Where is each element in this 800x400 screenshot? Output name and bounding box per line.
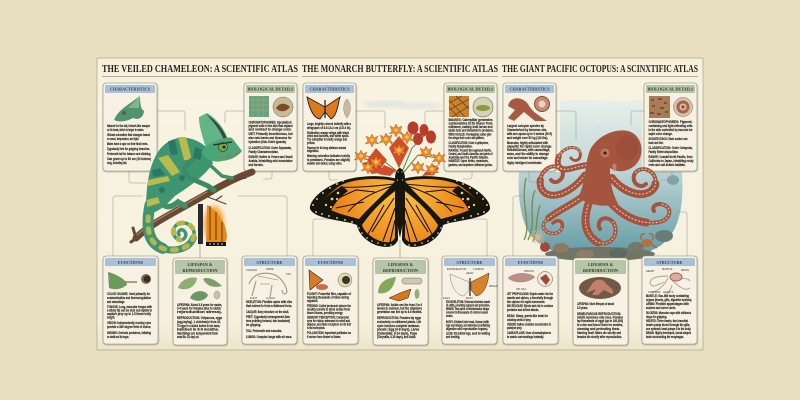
card: chameleon characteristics: Zygodactyl feet for gripping branches. bbox=[107, 147, 150, 151]
card: butterfly functions: FUNCTIONS bbox=[318, 260, 343, 265]
icon: butterfly life cycle bbox=[378, 277, 422, 301]
card: octopus lifespan and reproduction: Starving itself. Males die shortly and bbox=[577, 331, 621, 335]
card: octopus lifespan and reproduction: lay thousands of eggs (up to 100,000) bbox=[577, 319, 623, 323]
card: octopus lifespan and reproduction: LIFESPAN & bbox=[588, 262, 613, 267]
card: octopus biological details: taste and feel. bbox=[648, 141, 664, 145]
card: chameleon structure: TAIL: Prehensile and muscular. bbox=[246, 329, 282, 333]
card: butterfly biological details: cardenolides in its tissue from bbox=[448, 122, 492, 126]
card: octopus characteristics: capacity for rapid color change. bbox=[507, 144, 552, 148]
card: butterfly functions: mouth) unrolls to drink nectar from bbox=[307, 308, 350, 312]
card: chameleon lifespan and reproduction: sexual life, 4-14 days) out. bbox=[177, 335, 199, 339]
card: butterfly characteristics: The caterpillar is boldly orange and bbox=[307, 138, 347, 142]
card: octopus structure: rings for gripping. bbox=[646, 315, 667, 319]
card: octopus biological details: SUCKER DISCS: Each sucker can bbox=[648, 137, 688, 141]
icon: wing scales bbox=[449, 96, 469, 117]
card: octopus functions: cracking shells of prey. bbox=[507, 318, 531, 322]
card: octopus characteristics: with arm spans up to 9 meters (30 ft) bbox=[506, 132, 552, 136]
card: octopus lifespan and reproduction: REPRODUCTION bbox=[583, 268, 619, 273]
card: butterfly structure: STRUCTURE bbox=[456, 260, 482, 265]
card: butterfly structure: and feeding. bbox=[446, 335, 460, 339]
card: chameleon structure bbox=[242, 256, 297, 344]
mantle shading bbox=[616, 135, 638, 161]
diagram: octopus anatomy: SUCKERS bbox=[648, 290, 661, 294]
card: octopus biological details: containing and light-reflecting cells bbox=[648, 124, 693, 128]
card: chameleon functions: length. bbox=[107, 316, 115, 320]
icon: skin scales bbox=[249, 96, 269, 117]
card: octopus functions: JET PROPULSION: Expels water via the bbox=[507, 292, 553, 296]
card: butterfly lifespan and reproduction: weeks in summer, but the migratory bbox=[376, 306, 422, 310]
card: octopus characteristics: Highly intelligent invertebrate. bbox=[507, 161, 542, 165]
card: octopus structure: one systemic heart pumps it to the body. bbox=[646, 327, 691, 331]
card: butterfly characteristics bbox=[303, 83, 356, 171]
diagram: chameleon skeleton: FOOT bbox=[250, 296, 258, 300]
icon: siphon and beak bbox=[508, 269, 552, 291]
icon: octopus and sucker bbox=[508, 96, 550, 121]
card: octopus biological details: CLASSIFICATION: Order Octopoda, bbox=[648, 146, 693, 150]
card: chameleon lifespan and reproduction: Hatchlings are independent from bbox=[177, 332, 218, 336]
card: butterfly functions: flower blooms, providing energy. bbox=[307, 311, 343, 315]
card: octopus structure: MANTLE: Sac-like body containing bbox=[646, 294, 689, 298]
diagram: chameleon skeleton: SPINE bbox=[266, 267, 274, 271]
card: butterfly functions: traveling thousands of miles during bbox=[307, 296, 349, 300]
card: butterfly characteristics: wingspan of 8.9-10.2 cm (3.5-4 in). bbox=[306, 126, 351, 130]
diagram: butterfly anatomy: THORAX bbox=[473, 267, 484, 271]
icon: monarch and chrysalis bbox=[307, 97, 350, 119]
watercolor sky behind butterfly bbox=[363, 101, 442, 109]
card: butterfly functions: to find nectar plants. bbox=[307, 326, 325, 330]
yellow bands bbox=[147, 137, 192, 207]
card: butterfly functions: FEEDING: Coiled proboscis (above the bbox=[307, 304, 351, 308]
title: monarch butterfly: THE MONARCH BUTTERFLY: A SCIENTIFIC ATLAS bbox=[302, 64, 498, 75]
hind leg bbox=[160, 200, 185, 207]
card: octopus structure bbox=[642, 256, 697, 344]
card: octopus functions: mantle and siphon, a forcefully through bbox=[507, 296, 553, 300]
card: butterfly characteristics: veins and borders, and white spots. bbox=[307, 134, 349, 138]
title: giant pacific octopus: THE GIANT PACIFIC OCTOPUS: A SCINXTIFIC ATLAS bbox=[502, 64, 698, 75]
diagram: octopus anatomy: HEARTS bbox=[663, 290, 674, 294]
card: chameleon biological details: and contract to change color. bbox=[248, 128, 292, 132]
siphon bbox=[612, 164, 616, 171]
card: butterfly structure: LEGS: Six jointed legs, used for walking bbox=[446, 332, 490, 336]
card: chameleon lifespan and reproduction: LIFESPAN: About 6-8 years for males, bbox=[177, 303, 222, 307]
card: octopus lifespan and reproduction: 3-5 years. bbox=[577, 306, 588, 310]
card: butterfly functions: it moves from flower to flower. bbox=[307, 335, 341, 339]
card: chameleon biological details: CHROMATOPHORES: Specialized bbox=[248, 120, 292, 124]
card: butterfly structure: BODY: Divided into head, thorax (with bbox=[446, 320, 489, 324]
card: butterfly functions: balance, and taste receptors on its feet bbox=[307, 322, 352, 326]
card: octopus biological details: California to Japan, inhabiting rocky bbox=[648, 159, 694, 163]
card: octopus lifespan and reproduction bbox=[573, 258, 628, 345]
icon: skin cell circle bbox=[273, 97, 293, 117]
card: octopus characteristics: color and texture for camouflage. bbox=[507, 156, 548, 160]
diagram: chameleon skeleton: TAIL bbox=[286, 272, 292, 276]
card: butterfly structure bbox=[442, 256, 498, 344]
card: chameleon lifespan and reproduction: reproduction stress). bbox=[177, 310, 222, 314]
diagram: chameleon skeleton bbox=[246, 267, 292, 300]
card: butterfly functions: FLIGHT: Powerful flier, capable of bbox=[307, 292, 352, 296]
diagram: butterfly anatomy: LEGS bbox=[443, 296, 450, 300]
card: octopus biological details: rapid color change. bbox=[648, 132, 673, 136]
card: octopus lifespan and reproduction: SEMELPAROUS REPRODUCTION: bbox=[577, 312, 621, 316]
illustration: veiled chameleon bbox=[131, 113, 252, 250]
card: butterfly lifespan and reproduction: (Caterpillar, 9-14 days), Pupa bbox=[377, 332, 417, 336]
card: octopus functions: paralyze prey. bbox=[507, 326, 522, 330]
illustration: giant pacific octopus bbox=[540, 130, 669, 243]
icon: chameleon and eye bbox=[108, 272, 151, 289]
card: chameleon functions: COLOR CHANGE: Used primarily for bbox=[107, 292, 150, 296]
branch bbox=[131, 172, 252, 242]
connector lines bbox=[113, 111, 687, 258]
card: butterfly functions bbox=[303, 256, 358, 344]
card: chameleon characteristics: long, including tail. bbox=[107, 161, 127, 165]
icon: siphon and beak: INK SAC bbox=[516, 287, 527, 291]
diagram: butterfly anatomy: BODY bbox=[466, 296, 474, 300]
diagram: butterfly anatomy: WINGS bbox=[489, 284, 498, 288]
icon: chameleon head bbox=[114, 96, 144, 121]
icon: octopus in den bbox=[579, 277, 621, 299]
card: octopus structure: STRUCTURE bbox=[656, 260, 682, 265]
card: chameleon characteristics: Males have a spur on their hind heels. bbox=[107, 142, 148, 146]
card: octopus characteristics: and weight over 50 kg (110 lbs). bbox=[507, 136, 548, 140]
card: chameleon functions: TONGUE: Long, muscular tongue with bbox=[107, 305, 152, 309]
tail bbox=[148, 205, 194, 250]
suckers bbox=[540, 148, 669, 243]
card: chameleon structure: toes pointing forward, two backward) bbox=[246, 319, 290, 323]
card: chameleon lifespan and reproduction: 70 eggs in a clutch buried in hot sand, bbox=[177, 324, 220, 328]
card: butterfly lifespan and reproduction: generation can live up to 8-9 months. bbox=[377, 310, 422, 314]
card: butterfly structure: scales. bbox=[446, 314, 453, 318]
card: octopus characteristics: Muscular, highly articulated with bbox=[507, 141, 548, 145]
icon: siphon and beak: SIPHON bbox=[524, 269, 534, 273]
diagram: octopus anatomy bbox=[646, 267, 690, 296]
title: veiled chameleon: THE VEILED CHAMELEON: A SCIENTIFIC ATLAS bbox=[102, 64, 298, 75]
head bbox=[201, 137, 242, 162]
card: octopus structure: SUCKERS: Muscular cups with chitinous bbox=[646, 311, 691, 315]
icon: caterpillar circle bbox=[473, 97, 493, 117]
icon: nautilus spiral bbox=[674, 98, 692, 116]
card: chameleon functions: provide a 360 degree field of vision. bbox=[107, 325, 151, 329]
card: chameleon characteristics bbox=[103, 83, 157, 171]
card: octopus biological details: in the skin controlled by muscles for bbox=[648, 128, 693, 132]
illustration: monarch butterfly bbox=[310, 168, 490, 247]
card: chameleon biological details: hydration (Sub-Order Iguania). bbox=[248, 140, 287, 144]
sea urchin bbox=[530, 229, 546, 245]
card: chameleon biological details: DIET: Primarily insectivorous, but bbox=[248, 132, 293, 136]
card: butterfly biological details: Australia and the Pacific Islands. bbox=[448, 156, 489, 160]
card: chameleon functions: on stealth and its tongue. bbox=[107, 335, 129, 339]
atlas sheet panel bbox=[97, 58, 703, 350]
card: octopus characteristics: Reddish-brown, with camouflage, bbox=[507, 148, 550, 152]
card: octopus functions: predators and deflect attacks. bbox=[507, 308, 539, 312]
card: butterfly functions: SENSORY PERCEPTION: Compound bbox=[307, 316, 349, 320]
card: butterfly biological details: RANGE: Found throughout North, bbox=[448, 148, 492, 152]
arms bbox=[540, 148, 669, 243]
underwater scene behind octopus bbox=[519, 100, 682, 261]
dark mottling bbox=[152, 140, 203, 193]
card: octopus functions: the siphon for rapid movement. bbox=[507, 300, 545, 304]
card: chameleon functions: VISION: Independently moving eyes bbox=[107, 321, 151, 325]
card: butterfly functions: POLLINATION: Important pollinator as bbox=[307, 331, 351, 335]
card: chameleon biological details: and forests. bbox=[248, 163, 264, 167]
card: chameleon structure: that extend to form a flattened form. bbox=[246, 304, 292, 308]
card: octopus lifespan and reproduction: Adults reproduce only once. Females bbox=[577, 316, 623, 320]
card: butterfly lifespan and reproduction: REPRODUCTION: Females lay eggs bbox=[377, 316, 421, 320]
illustration: milkweed flowers bbox=[354, 122, 446, 176]
card: chameleon structure: for gripping. bbox=[246, 323, 261, 327]
diagram: octopus anatomy: MANTLE bbox=[662, 267, 673, 271]
card: octopus structure: BRAIN: Highly developed, donut-shaped bbox=[646, 331, 691, 335]
rear foreleg bbox=[210, 165, 232, 178]
card: octopus lifespan and reproduction: females die shortly after reproduction. bbox=[577, 335, 622, 339]
seabed rocks bbox=[540, 175, 679, 261]
body bbox=[146, 138, 213, 213]
card: octopus structure: brain surrounding the esophagus. bbox=[646, 335, 684, 339]
card: butterfly biological details: BIOLOGICAL DETAILS bbox=[448, 86, 494, 92]
card: butterfly characteristics: Warning coloration indicates toxicity bbox=[307, 154, 350, 158]
card: chameleon characteristics: Named for the tall, helmet-like casque bbox=[107, 124, 150, 128]
card: chameleon structure: CASQUE: Bony structure on the skull. bbox=[246, 310, 289, 314]
card: octopus characteristics: arms, and the ability to change bbox=[507, 152, 549, 156]
card: octopus characteristics: Characterized by immense size, bbox=[507, 128, 547, 132]
card: butterfly structure: covered in thousands of colored scales bbox=[446, 310, 488, 314]
card: octopus functions: INK RELEASE: Ejects dark ink to confuse bbox=[507, 304, 553, 308]
card: octopus characteristics bbox=[503, 83, 556, 171]
card: butterfly characteristics: yellow. bbox=[307, 141, 315, 145]
card: butterfly characteristics: Famous for its long-distance annual bbox=[307, 146, 346, 150]
card: chameleon biological details bbox=[244, 83, 297, 171]
card: octopus functions: FUNCTIONS bbox=[518, 260, 543, 265]
card: chameleon structure: LUNGS: Complex lungs with air sacs. bbox=[246, 335, 292, 339]
card: octopus structure: hearts pump blood through the gills, bbox=[646, 323, 690, 327]
card: butterfly lifespan and reproduction: LIFESPAN: Adults can live from 2 to 6 bbox=[377, 303, 422, 307]
card: chameleon lifespan and reproduction: REPRODUCTION bbox=[182, 268, 218, 273]
card: octopus characteristics: CHARACTERISTICS bbox=[510, 86, 550, 92]
card: butterfly functions: migration. bbox=[307, 299, 318, 303]
card: butterfly structure: of chitin, providing support and protection. bbox=[446, 304, 490, 308]
card: chameleon lifespan and reproduction bbox=[173, 258, 227, 345]
card: chameleon functions: HISSING: Defends predators, inflating bbox=[107, 331, 151, 335]
card: butterfly biological details: IMAGES: Caterpillar generates bbox=[448, 118, 493, 122]
card: octopus characteristics: Largest octopus species by bbox=[507, 124, 544, 128]
card: butterfly structure: WINGS: Two pairs of membranous wings bbox=[446, 307, 489, 311]
card: octopus functions: VENOM: Saliva contains neurotoxins to bbox=[507, 322, 551, 326]
card: octopus biological details: BIOLOGICAL DETAILS bbox=[648, 86, 694, 92]
card: chameleon functions: FUNCTIONS bbox=[118, 260, 143, 265]
card: butterfly biological details: CLASSIFICATION: Order Lepidoptera, bbox=[448, 141, 489, 145]
card: butterfly biological details: the wings their color and pattern. bbox=[448, 136, 485, 140]
card: octopus biological details: CHROMATOPHORES: Pigment- bbox=[648, 120, 693, 124]
card: chameleon characteristics: CHARACTERISTICS bbox=[110, 86, 150, 92]
card: chameleon characteristics: Prehensile tail for balance and climbing. bbox=[107, 152, 151, 156]
card: octopus biological details: RANGE: Coastal North Pacific, from bbox=[648, 155, 692, 159]
mantle and head bbox=[578, 130, 642, 206]
butterfly wing fragment bbox=[198, 204, 227, 246]
card: butterfly functions: eyes for vision; antennae for smell and bbox=[307, 319, 350, 323]
card: octopus structure: ARMS: Flexible appendages with bbox=[646, 302, 689, 306]
card: chameleon biological details: Arabia, inhabiting arid mountains bbox=[248, 159, 293, 163]
card: butterfly lifespan and reproduction: LIFESPAN & bbox=[388, 262, 413, 267]
card: chameleon biological details: pigment cells in the skin that expand bbox=[248, 124, 292, 128]
card: octopus lifespan and reproduction: LIFESPAN: Short lifespan of about bbox=[577, 302, 615, 306]
card: butterfly lifespan and reproduction: phosis: Egg (3-8 days), Larva bbox=[377, 328, 419, 332]
card: octopus biological details: reefs and soft-bottom habitats. bbox=[648, 163, 686, 167]
card: butterfly structure: EXOSKELETON: External skeleton made bbox=[446, 300, 490, 304]
eye bbox=[600, 148, 610, 158]
card: butterfly characteristics: to predators. Females are slightly bbox=[307, 158, 350, 162]
card: butterfly characteristics: Large, brightly colored butterfly with a bbox=[307, 122, 351, 126]
card: octopus lifespan and reproduction: in a den and brood them for months, bbox=[577, 323, 623, 327]
icon: skin texture bbox=[649, 96, 670, 118]
card: butterfly structure: legs and wings), and abdomen (containing bbox=[446, 324, 490, 328]
card: chameleon functions: capture prey up to 1.5 times body bbox=[107, 312, 151, 316]
diagram: octopus anatomy: BRAIN bbox=[681, 268, 689, 272]
card: chameleon lifespan and reproduction: LIFESPAN & bbox=[188, 262, 213, 267]
card: chameleon characteristics: on its head, which is larger in males. bbox=[107, 128, 144, 132]
card: octopus lifespan and reproduction: cleaning and protecting them. bbox=[577, 327, 620, 331]
card: octopus functions: CAMOUFLAGE: Uses chromatophores bbox=[507, 331, 551, 335]
card: butterfly biological details: Family Nymphalidae. bbox=[448, 144, 473, 148]
card: chameleon structure: SKELETON: Flexible spine with ribs bbox=[246, 300, 292, 304]
card: octopus biological details bbox=[644, 83, 697, 171]
card: butterfly characteristics: smaller and darker, using veins. bbox=[307, 162, 342, 166]
casque rear edge bbox=[206, 114, 227, 140]
card: chameleon biological details: also eats leaves and blossoms for bbox=[248, 136, 292, 140]
air bubbles bbox=[588, 120, 602, 138]
card: chameleon functions: and camouflage. bbox=[107, 300, 125, 304]
body bbox=[395, 168, 405, 238]
card: butterfly biological details: milkweed, making both larvae and bbox=[448, 125, 492, 129]
foreleg bbox=[185, 160, 214, 190]
diagram: butterfly anatomy: HEAD bbox=[466, 271, 473, 275]
card: octopus structure: suckers and nerve cords. bbox=[646, 306, 676, 310]
diagram: butterfly anatomy: EXOSKELETON bbox=[447, 267, 466, 271]
card: octopus functions: BEAK: Sharp, parrot-like beak for bbox=[507, 314, 548, 318]
card: chameleon biological details: Family Chamaeleonidae. bbox=[248, 150, 279, 154]
diagram: chameleon skeleton: CASQUE bbox=[246, 268, 257, 272]
card: butterfly lifespan and reproduction: REPRODUCTION bbox=[383, 268, 419, 273]
card: chameleon biological details: RANGE: Native to Yemen and Saudi bbox=[248, 155, 293, 159]
card: butterfly lifespan and reproduction: exclusively on milkweed plants. Life bbox=[377, 320, 421, 324]
card: chameleon lifespan and reproduction: 2-4 years for females (due to clutch bbox=[177, 306, 221, 310]
card: chameleon biological details: BIOLOGICAL DETAILS bbox=[248, 86, 294, 92]
diagram: butterfly anatomy bbox=[443, 267, 498, 300]
icon: chameleon life stages bbox=[178, 277, 222, 301]
card: chameleon characteristics: Can grow up to 60 cm (24 inches) bbox=[107, 157, 151, 161]
card: butterfly biological details bbox=[444, 83, 497, 171]
card: octopus functions bbox=[503, 256, 558, 344]
card: octopus structure: organs (hearts, gills, digestive system). bbox=[646, 298, 692, 302]
card: chameleon characteristics: Vibrant coloration that changes based bbox=[107, 133, 150, 137]
card: butterfly lifespan and reproduction bbox=[373, 258, 428, 345]
card: octopus functions: to match surroundings instantly. bbox=[507, 335, 544, 339]
card: octopus structure: HEARTS: Three hearts, two branchial bbox=[646, 319, 688, 323]
card: butterfly biological details: Central, and South America, and parts of bbox=[448, 152, 493, 156]
card: chameleon structure: FEET: Zygodactyl arrangement (two bbox=[246, 315, 290, 319]
eye bbox=[218, 142, 228, 152]
card: butterfly biological details: WING SCALES: Overlapping scales give bbox=[448, 132, 492, 136]
card: octopus biological details: Family Enteroctopodidae. bbox=[648, 150, 679, 154]
card: butterfly characteristics: CHARACTERISTICS bbox=[310, 86, 350, 92]
card: butterfly lifespan and reproduction: cycle involves complete metamor- bbox=[377, 324, 421, 328]
card: chameleon lifespan and reproduction: (egg-laying). 1 clutches/yr from 20- bbox=[177, 320, 222, 324]
thorax dots bbox=[397, 171, 403, 181]
card: butterfly biological details: HABITAT: Open fields, meadows, bbox=[448, 159, 489, 163]
card: butterfly characteristics: Distinctive orange wings with black bbox=[307, 131, 349, 135]
card: chameleon functions: communication and thermoregulation bbox=[107, 296, 151, 300]
card: chameleon biological details: CLASSIFICATION: Order Squamata, bbox=[248, 146, 292, 150]
card: butterfly structure: digestive and reproductive organs). bbox=[446, 327, 488, 331]
card: chameleon structure: STRUCTURE bbox=[256, 260, 282, 265]
brow and mouth bbox=[213, 142, 240, 157]
card: butterfly biological details: adults toxic and distasteful to predators. bbox=[448, 128, 494, 132]
diagram: chameleon skeleton: LUNGS bbox=[266, 296, 275, 300]
card: chameleon functions bbox=[103, 256, 158, 344]
casque bbox=[199, 113, 228, 148]
card: butterfly biological details: gardens, and anywhere milkweed grows. bbox=[448, 163, 493, 167]
card: chameleon characteristics: on mood, temperature, and light. bbox=[107, 137, 139, 141]
crab bbox=[637, 234, 657, 248]
card: butterfly lifespan and reproduction: (Chrysalis, 8-15 days), and Adult. bbox=[377, 335, 416, 339]
card: chameleon lifespan and reproduction: REPRODUCTION: Oviparous, eggs bbox=[177, 316, 222, 320]
card: butterfly characteristics: migration. bbox=[307, 149, 319, 153]
card: chameleon functions: a sticky tip can be shot out rapidly to bbox=[107, 308, 152, 312]
kelp bbox=[524, 178, 540, 242]
card: chameleon lifespan and reproduction: hatched in 6-9 months. bbox=[177, 328, 219, 332]
diagram: octopus anatomy: HEART bbox=[646, 269, 655, 273]
icon: butterfly feeding and eye bbox=[309, 270, 352, 290]
